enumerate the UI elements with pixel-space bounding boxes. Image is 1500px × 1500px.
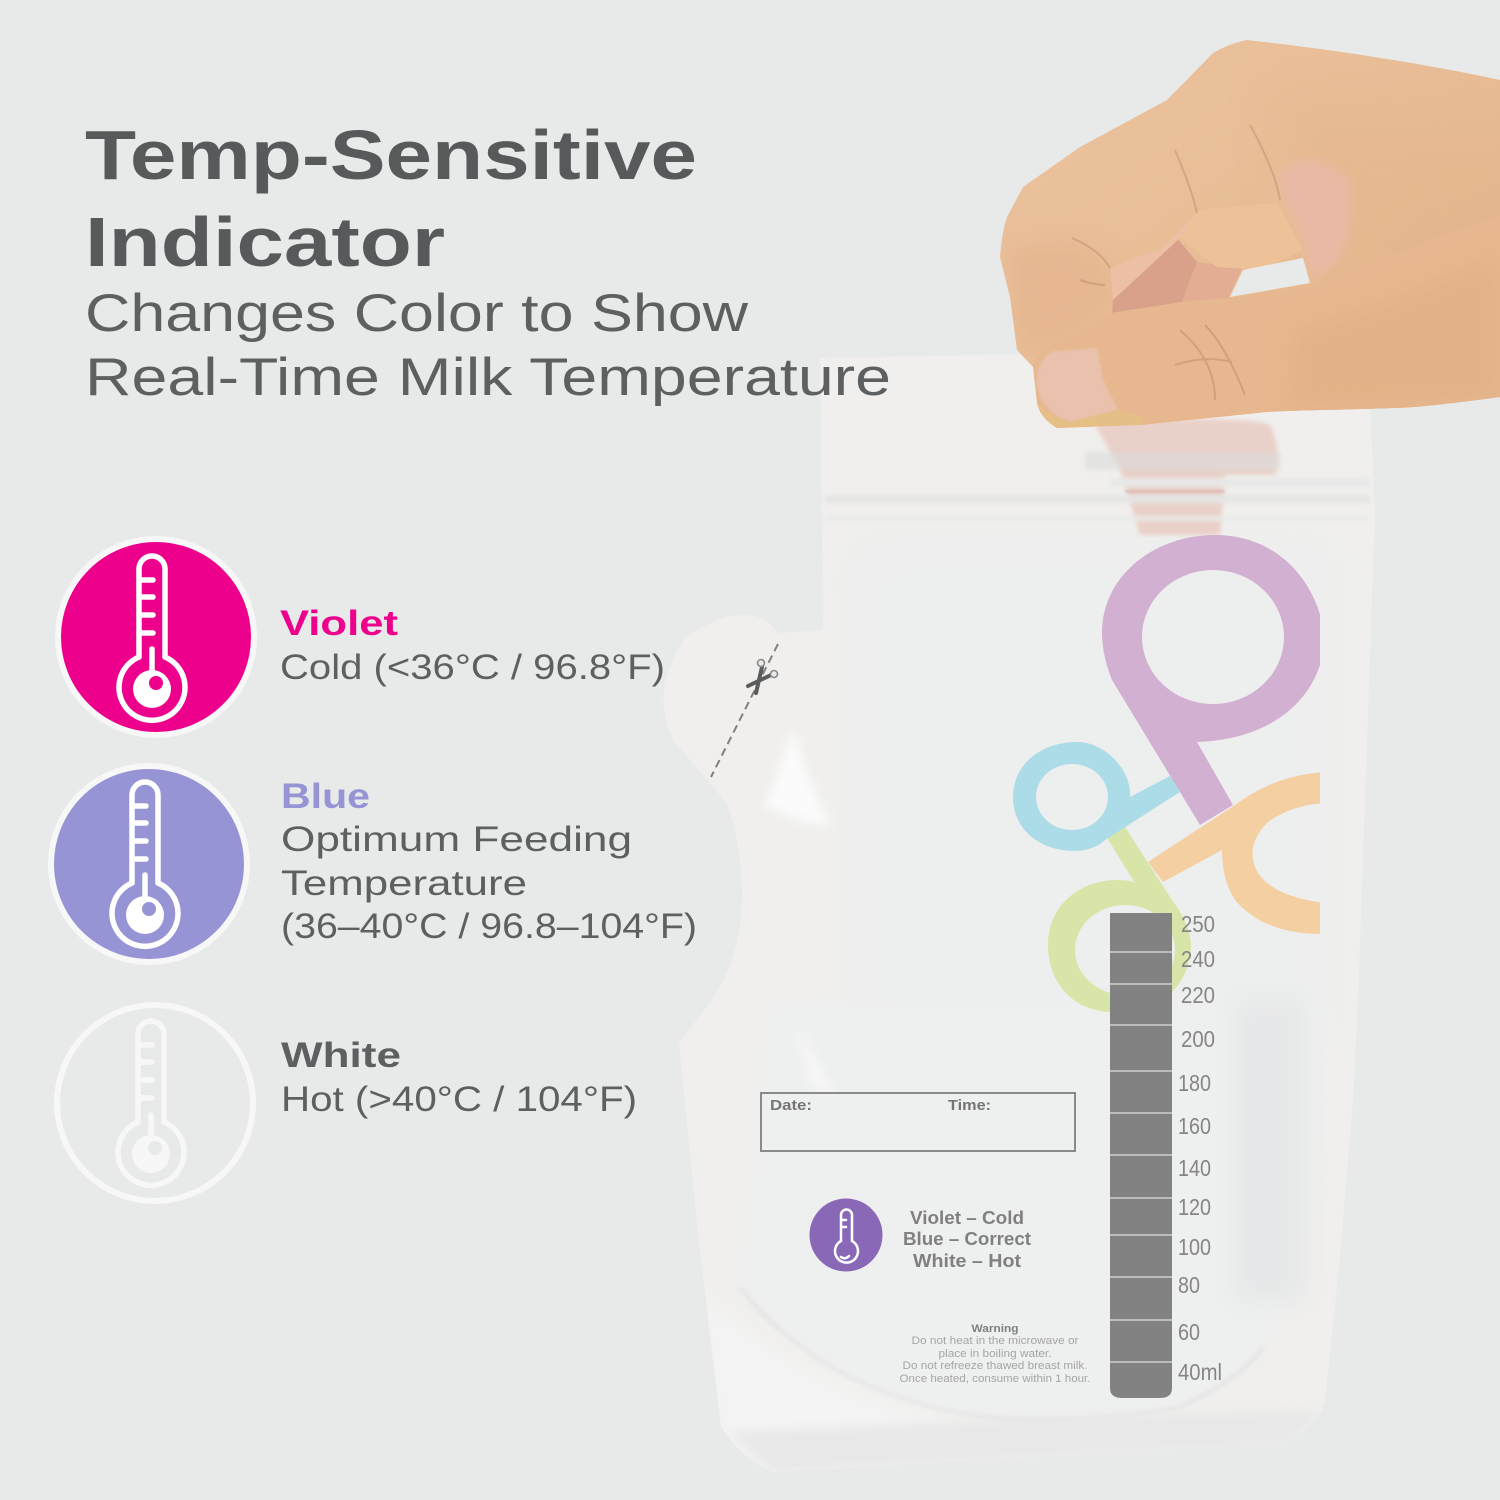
- measurement labels: 180: [1178, 1070, 1211, 1096]
- measurement labels: 40ml: [1178, 1359, 1222, 1385]
- milk storage bag: [704, 418, 1372, 1459]
- measurement labels: 200: [1181, 1026, 1215, 1052]
- legend: violet: Cold (<36°C / 96.8°F): [280, 648, 665, 687]
- measurement labels: 60: [1178, 1319, 1200, 1345]
- bag warning text: Do not heat in the microwave or: [912, 1335, 1079, 1347]
- bag thermometer icon: [810, 1198, 882, 1272]
- subtitle: [85, 284, 891, 407]
- measurement labels: 160: [1178, 1113, 1211, 1139]
- subtitle: Changes Color to Show: [85, 284, 749, 343]
- bag logo rings: [1013, 535, 1325, 1012]
- legend: blue: [281, 777, 697, 946]
- date and time box: [761, 1093, 1075, 1151]
- measurement bar: [1110, 913, 1172, 1398]
- title: [85, 116, 697, 281]
- icon: violet thermometer badge: [58, 539, 254, 735]
- bag warning text: Do not refreeze thawed breast milk.: [902, 1360, 1088, 1372]
- legend: white: Hot (>40°C / 104°F): [281, 1080, 637, 1119]
- legend: blue: (36–40°C / 96.8–104°F): [281, 907, 697, 946]
- purple loop: [1102, 535, 1325, 825]
- subtitle: Real-Time Milk Temperature: [85, 348, 891, 407]
- measurement labels: [1178, 911, 1222, 1385]
- date and time box: Date:: [770, 1097, 812, 1114]
- measurement labels: 250: [1181, 911, 1215, 937]
- title: Indicator: [85, 203, 445, 281]
- tear line and scissors: [711, 644, 778, 777]
- legend: white: White: [281, 1036, 401, 1075]
- icon: blue thermometer badge: [51, 766, 247, 962]
- measurement labels: 120: [1178, 1194, 1211, 1220]
- bag colour key: Blue – Correct: [903, 1229, 1031, 1249]
- title: Temp-Sensitive: [85, 116, 697, 194]
- icon: white thermometer badge: [57, 1005, 253, 1201]
- bag warning text: place in boiling water.: [938, 1348, 1052, 1360]
- bag warning text: Warning: [972, 1323, 1018, 1335]
- measurement labels: 240: [1181, 946, 1215, 972]
- green loop: [1048, 827, 1191, 1012]
- bag colour key: Violet – Cold: [910, 1208, 1024, 1228]
- bag colour key: White – Hot: [913, 1251, 1021, 1271]
- legend: white: [281, 1036, 637, 1119]
- bag colour key: [903, 1208, 1031, 1271]
- measurement labels: 80: [1178, 1272, 1200, 1298]
- legend: blue: Blue: [281, 777, 370, 816]
- bag warning text: Once heated, consume within 1 hour.: [900, 1373, 1090, 1385]
- measurement labels: 220: [1181, 982, 1215, 1008]
- legend: blue: Optimum Feeding: [281, 820, 632, 859]
- orange loop: [1148, 772, 1325, 934]
- bag warning text: [900, 1323, 1090, 1385]
- legend: blue: Temperature: [281, 864, 527, 903]
- hand: [1000, 40, 1500, 428]
- measurement labels: 140: [1178, 1155, 1211, 1181]
- measurement labels: 100: [1178, 1234, 1211, 1260]
- blue loop: [1013, 742, 1180, 851]
- legend: violet: Violet: [280, 604, 398, 643]
- legend: violet: [280, 604, 665, 687]
- date and time box: Time:: [948, 1097, 991, 1114]
